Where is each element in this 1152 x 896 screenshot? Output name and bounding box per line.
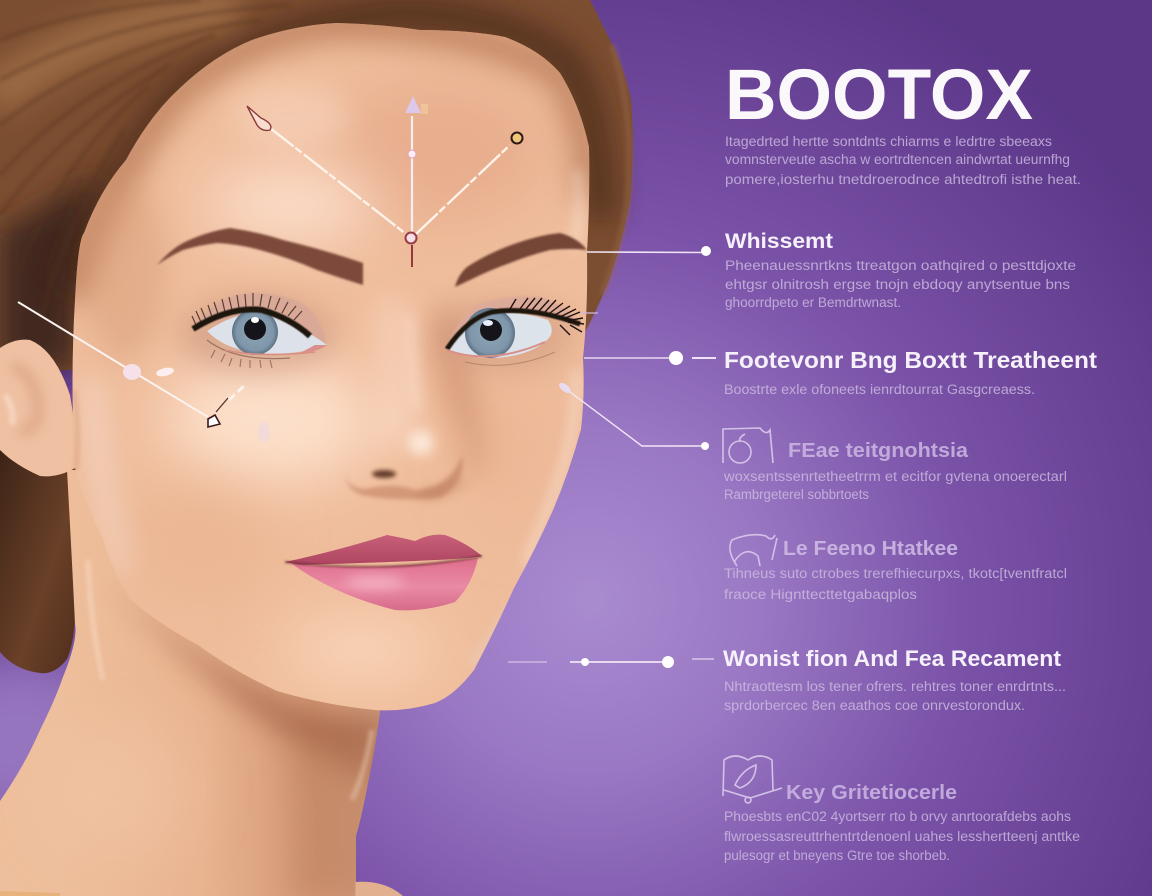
hair dark band along hairline [70,12,600,290]
ear [0,340,78,476]
portrait of woman [0,0,633,896]
lips [285,535,482,610]
title: BOOTOX [725,56,1033,135]
section: wonist [723,646,1066,713]
body text: sprdorbercec 8en eaathos coe onrvestorondux. [724,698,1025,713]
body text: ehtgsr olnitrosh ergse tnojn ebdoqy anytsentue bns [725,277,1070,292]
hair dark lower left [0,170,100,370]
face [70,23,592,710]
body text: flwroessasreuttrhentrtdenoenl uahes lesshertteenj anttke [724,829,1080,844]
needle tip [229,386,244,400]
temple shade [90,197,166,357]
body text: Boostrte exle ofoneets ienrdtourrat Gasgcreaess. [724,382,1035,397]
connector lines [508,246,716,668]
icon: face [723,428,773,463]
section: feeno hotkee [724,535,1067,602]
forehead centre tone [348,87,536,213]
body text: pulesogr et bneyens Gtre toe shorbeb. [724,848,950,863]
right eyebrow [455,233,587,287]
intro text block: pomere,iosterhu tnetdroerodnce ahtedtrofi isthe heat. [725,172,1081,187]
cheek dot [123,364,141,380]
connector four [508,656,714,668]
heading: FEae teitgnohtsia [788,440,969,462]
right rim light [602,45,629,295]
junction dot [406,232,416,244]
body text: Rambrgeterel sobbrtoets [724,487,869,502]
cheek line [18,302,208,417]
connector two [584,351,716,365]
short needle [216,398,228,412]
body text [723,469,1067,502]
intro text block: vomnsterveute ascha w eortrdtencen aindwrtat ueurnfhg [725,152,1070,167]
heading: Whissemt [725,230,833,253]
body text [724,566,1067,602]
hair light streak [0,10,240,100]
right cheek tone [467,370,557,530]
upper cheek highlight [165,355,375,485]
icon: leaf [723,756,782,803]
left eyebrow [157,228,363,285]
heading: Le Feeno Htatkee [783,538,958,560]
body text: Nhtraottesm los tener ofrers. rehtres toner enrdrtnts... [724,679,1066,694]
cheek dash [155,366,175,378]
section: face technique [723,428,1067,502]
section: key gritetiocerle [723,756,1080,863]
faint spots [258,422,270,442]
body text: Tihneus suto ctrobes trerefhiecurpxs, tkotc[tventfratcl [724,566,1067,581]
forehead highlight [230,85,350,145]
lighter purple behind neck [0,650,130,830]
intro text block [725,134,1081,187]
hairline shadow [70,23,592,300]
body text: woxsentssenrtetheetrrm et ecitfor gvtena onoerectarl [723,469,1067,484]
body text: Pheenauessnrtkns ttreatgon oathqired o pesttdjoxte [725,258,1076,273]
body text: Phoesbts enC02 4yortserr rto b orvy anrtoorafdebs aohs [724,809,1071,824]
right face edge light [525,170,579,565]
left cheek markers [18,302,270,442]
right eye [435,296,584,373]
vertical line [411,116,413,236]
hair bun [0,430,80,673]
neck and shoulder [0,470,403,896]
left diagonal line [270,128,406,234]
top triangle marker [405,96,421,113]
hair [0,0,633,370]
right diagonal line [416,145,510,234]
red stem [411,245,413,267]
body text: ghoorrdpeto er Bemdrtwnast. [725,295,901,310]
nose [345,300,485,499]
left eye [178,293,338,375]
body text [724,679,1066,713]
body text [724,809,1080,863]
strands [0,0,290,320]
mid dot [408,150,416,158]
heading: Wonist fion And Fea Recament [723,646,1062,671]
icon: hand [730,535,777,566]
right marker [512,132,522,144]
section: treatment [724,347,1097,397]
section: whissemt [725,230,1076,310]
left marker [247,106,271,130]
lower cheek tone [176,486,243,556]
connector one [587,246,711,256]
chin highlight [280,618,440,682]
heading: Footevonr Bng Boxtt Treatheent [724,347,1097,373]
marker [208,415,220,427]
cheek edge glow [92,380,125,570]
faint dash near eye [581,312,598,314]
body text: fraoce Hignttecttetgabaqplos [724,587,917,602]
small yellow swatch [421,104,428,114]
intro text block: Itagedrted hertte sontdnts chiarms e ledrtre sbeeaxs [725,134,1052,149]
forehead injection markers [247,96,522,267]
connector three [557,381,709,450]
heading: Key Gritetiocerle [786,782,957,804]
body text [725,258,1076,310]
